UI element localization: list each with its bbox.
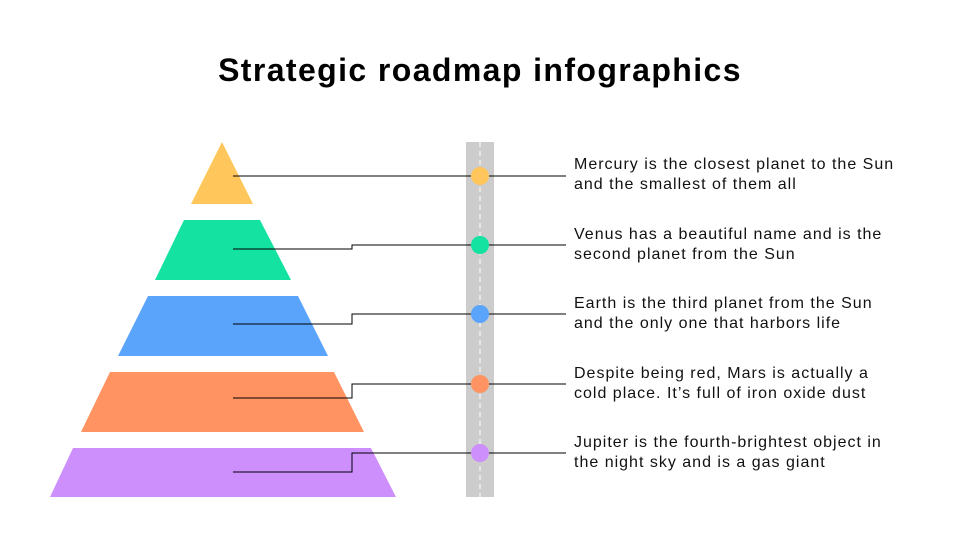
text: venus: Venus has a beautiful name and is the bbox=[574, 226, 882, 243]
road dots bbox=[471, 167, 489, 462]
level 4 bbox=[81, 372, 364, 432]
text: earth: Earth is the third planet from the Sun bbox=[574, 295, 873, 312]
text: earth bbox=[574, 295, 873, 332]
text: mars: Despite being red, Mars is actually a bbox=[574, 365, 869, 382]
level 2 bbox=[155, 220, 291, 280]
text: jupiter bbox=[574, 434, 882, 470]
title: Strategic roadmap infographics bbox=[218, 52, 742, 88]
road bbox=[466, 142, 494, 497]
text: jupiter: Jupiter is the fourth-brightest object in bbox=[574, 434, 882, 451]
text: mars: cold place. It’s full of iron oxide dust bbox=[574, 384, 866, 402]
text: venus: second planet from the Sun bbox=[574, 246, 796, 262]
connector lines bbox=[233, 176, 566, 472]
pyramid bbox=[50, 142, 396, 497]
text: earth: and the only one that harbors life bbox=[574, 314, 841, 332]
text: jupiter: the night sky and is a gas giant bbox=[574, 454, 826, 470]
text: mercury bbox=[574, 156, 894, 192]
text: mercury: Mercury is the closest planet to the Sun bbox=[574, 156, 894, 173]
level 3 bbox=[118, 296, 328, 356]
text: venus bbox=[574, 226, 882, 262]
level 5 bbox=[50, 448, 396, 497]
level 1 bbox=[191, 142, 253, 204]
text: mars bbox=[574, 365, 869, 402]
text: mercury: and the smallest of them all bbox=[574, 176, 797, 192]
